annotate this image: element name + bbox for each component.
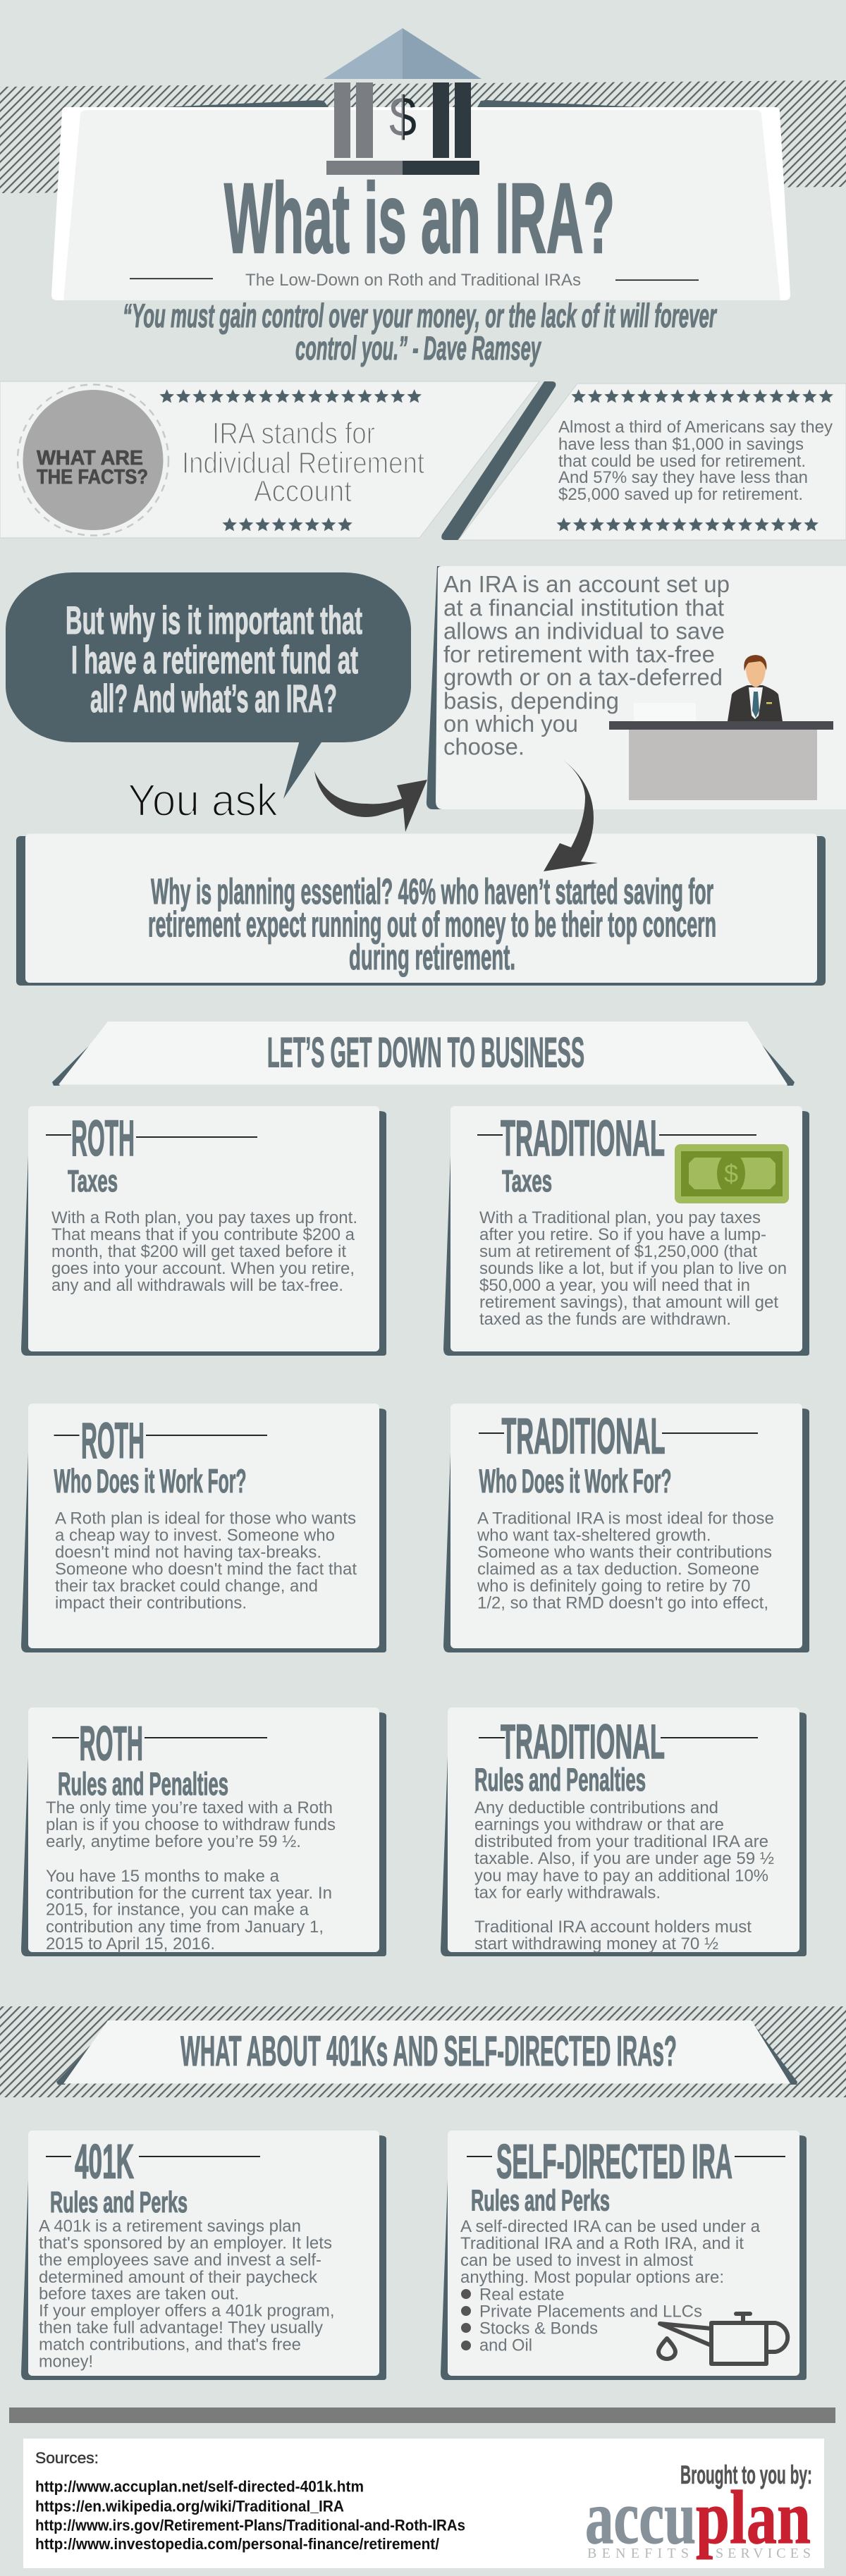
panel: facts right [458, 384, 846, 540]
body text [460, 2217, 760, 2287]
savings stats: And 57% say they have less than [558, 468, 808, 487]
savings stats: $25,000 saved up for retirement. [558, 485, 803, 504]
IRA definition [182, 417, 424, 508]
body text: contribution for the current tax year. In [46, 1884, 332, 1903]
panel: why planning [16, 833, 826, 986]
definition text: on which you [443, 711, 578, 737]
definition text: An IRA is an account set up [443, 571, 730, 597]
stars bottom [221, 517, 353, 532]
body text [46, 1798, 336, 1954]
body text: who want tax-sheltered growth. [477, 1526, 711, 1545]
stars top [159, 389, 422, 403]
body text [479, 1208, 787, 1329]
card: Self-directed IRA [441, 2130, 807, 2380]
definition text: allows an individual to save [443, 618, 725, 644]
IRA definition: Account [254, 474, 352, 508]
panel: hero title [51, 100, 790, 300]
definition text [443, 571, 730, 760]
body text: determined amount of their paycheck [39, 2268, 318, 2287]
body text: goes into your account. When you retire, [51, 1259, 355, 1278]
body text: taxable. Also, if you are under age 59 ½ [474, 1849, 774, 1868]
body text: 2015 to April 15, 2016. [46, 1934, 215, 1954]
speech bubble: I have a retirement fund at [71, 637, 358, 682]
panel: facts left [0, 381, 539, 538]
card: Traditional rules [441, 1707, 807, 1956]
icon: banker at desk [609, 655, 833, 800]
card: Roth who [21, 1404, 386, 1652]
speech bubble [6, 572, 411, 799]
divider bar [9, 2408, 835, 2423]
body text [55, 1509, 357, 1613]
bullet list [461, 2286, 702, 2355]
body text: A Traditional IRA is most ideal for those [477, 1509, 774, 1528]
arrow: definition to why panel [544, 759, 598, 871]
body text: sum at retirement of $1,250,000 (that [479, 1242, 757, 1261]
heading: ROTH [71, 1111, 135, 1167]
body text: Traditional IRA account holders must [474, 1918, 752, 1937]
body text: a cheap way to invest. Someone who [55, 1526, 335, 1545]
body text: The only time you’re taxed with a Roth [46, 1798, 333, 1817]
body text: can be used to invest in almost [460, 2251, 693, 2270]
heading: TRADITIONAL [502, 1409, 666, 1465]
subheading: Who Does it Work For? [54, 1462, 247, 1499]
speech bubble: But why is it important that [66, 598, 362, 642]
panel: footer [23, 2439, 824, 2568]
stars bottom [556, 517, 819, 532]
definition text: choose. [443, 733, 525, 760]
icon: oil can [658, 2314, 787, 2364]
speech bubble: all? And what’s an IRA? [90, 676, 337, 720]
subheading: Rules and Penalties [58, 1766, 228, 1802]
sources: http://www.accuplan.net/self-directed-401k.htm [35, 2477, 364, 2496]
savings stats: that could be used for retirement. [558, 452, 806, 471]
arrow: bubble to definition [314, 771, 427, 832]
hatched ribbon: header [0, 80, 846, 193]
icon: dashed circle badge: WHAT ARE [37, 447, 143, 470]
body text: 2015, for instance, you can make a [46, 1901, 309, 1919]
body text: That means that if you contribute $200 a [51, 1225, 355, 1244]
IRA definition: IRA stands for [212, 417, 375, 450]
sources: Sources: [35, 2449, 99, 2467]
body text [477, 1509, 774, 1613]
heading: TRADITIONAL [501, 1715, 665, 1769]
panel: 401k heading [56, 2020, 797, 2085]
body text: If your employer offers a 401k program, [39, 2301, 334, 2321]
body text: any and all withdrawals will be tax-free. [51, 1276, 343, 1295]
heading: ROTH [79, 1716, 143, 1771]
body text: contribution any time from January 1, [46, 1918, 324, 1937]
body text: doesn't mind not having tax-breaks. [55, 1542, 321, 1562]
panel: why planning: during retirement. [349, 937, 515, 977]
sources: http://www.irs.gov/Retirement-Plans/Traditional-and-Roth-IRAs [35, 2517, 465, 2534]
heading: 401K [75, 2135, 134, 2188]
body text: tax for early withdrawals. [474, 1884, 661, 1902]
body text: start withdrawing money at 70 ½ [474, 1934, 718, 1954]
body text [39, 2216, 334, 2372]
body text: A Roth plan is ideal for those who wants [55, 1509, 356, 1528]
bullet list: Stocks & Bonds [479, 2319, 598, 2338]
definition text: basis, depending [443, 688, 619, 713]
bullet list: Private Placements and LLCs [479, 2302, 702, 2321]
body text: their tax bracket could change, and [55, 1576, 318, 1596]
logo: accuplan [585, 2476, 811, 2561]
heading: ROTH [81, 1413, 145, 1469]
body text: Any deductible contributions and [474, 1798, 718, 1817]
panel: IRA definition [427, 566, 846, 809]
card: 401K [21, 2130, 386, 2380]
bullet list: and Oil [479, 2336, 532, 2355]
sources [35, 2449, 465, 2553]
definition text: growth or on a tax-deferred [443, 664, 723, 690]
card: Roth rules [21, 1707, 386, 1956]
subtitle with rules: The Low-Down on Roth and Traditional IRAs [245, 271, 581, 290]
body text: you may have to pay an additional 10% [474, 1867, 768, 1885]
body text: impact their contributions. [55, 1593, 247, 1613]
heading: TRADITIONAL [501, 1111, 665, 1167]
stars top [570, 389, 834, 403]
body text: that's sponsored by an employer. It lets [39, 2233, 332, 2253]
body text: retirement savings), that amount will get [479, 1293, 778, 1312]
body text: money! [39, 2352, 93, 2372]
icon: banknote [675, 1144, 789, 1203]
body text: match contributions, and that's free [39, 2335, 301, 2355]
divider slash [441, 381, 556, 540]
card: Traditional who [443, 1404, 809, 1652]
body text: Traditional IRA and a Roth IRA, and it [460, 2234, 744, 2253]
IRA definition: Individual Retirement [182, 446, 424, 480]
body text: claimed as a tax deduction. Someone [477, 1559, 759, 1579]
body text: $50,000 a year, you will need that in [479, 1276, 750, 1295]
body text: taxed as the funds are withdrawn. [479, 1310, 731, 1329]
savings stats [558, 417, 833, 504]
logo: accuplan: accu [585, 2476, 696, 2560]
body text: after you retire. So if you have a lump- [479, 1225, 766, 1244]
logo: accuplan: plan [696, 2476, 811, 2560]
body text: early, anytime before you’re 59 ½. [46, 1832, 301, 1851]
body text: With a Roth plan, you pay taxes up front. [51, 1208, 357, 1227]
icon: banknote: $ [724, 1159, 738, 1188]
body text: anything. Most popular options are: [460, 2268, 724, 2287]
body text: before taxes are taken out. [39, 2284, 239, 2304]
body text: 1/2, so that RMD doesn't go into effect, [477, 1593, 768, 1613]
savings stats: have less than $1,000 in savings [558, 435, 804, 454]
logo: accuplan: BENEFITS [587, 2546, 689, 2561]
body text: month, that $200 will get taxed before it [51, 1242, 346, 1261]
subheading: Taxes [502, 1164, 552, 1198]
body text: who is definitely going to retire by 70 [477, 1576, 750, 1596]
definition text: for retirement with tax-free [443, 642, 715, 667]
icon: bank building: $ [389, 85, 417, 148]
sources: https://en.wikipedia.org/wiki/Traditional_IRA [35, 2497, 344, 2515]
body text: earnings you withdraw or that are [474, 1815, 724, 1834]
body text: With a Traditional plan, you pay taxes [479, 1208, 761, 1227]
You ask label: You ask [128, 775, 278, 826]
bullet list: Real estate [479, 2286, 564, 2304]
body text: distributed from your traditional IRA are [474, 1832, 768, 1851]
icon: bank building [324, 28, 482, 175]
subheading: Rules and Perks [50, 2185, 188, 2219]
subheading: Rules and Perks [471, 2184, 610, 2216]
body text: the employees save and invest a self- [39, 2250, 321, 2270]
card: Traditional taxes [443, 1106, 809, 1356]
body text: then take full advantage! They usually [39, 2318, 324, 2338]
icon: dashed circle badge [18, 385, 168, 536]
hatched ribbon: second section [0, 2006, 846, 2097]
icon: dashed circle badge: THE FACTS? [37, 466, 148, 489]
body text: A self-directed IRA can be used under a [460, 2217, 760, 2236]
quote [123, 297, 717, 367]
definition text: at a financial institution that [443, 595, 724, 620]
savings stats: Almost a third of Americans say they [558, 417, 833, 437]
subheading: Taxes [68, 1164, 118, 1198]
quote: control you.” - Dave Ramsey [295, 329, 542, 367]
body text [474, 1798, 774, 1954]
body text: A 401k is a retirement savings plan [39, 2216, 301, 2236]
subheading: Rules and Penalties [474, 1762, 646, 1798]
panel: business heading [52, 1022, 795, 1086]
body text: sounds like a lot, but if you plan to live on [479, 1259, 787, 1278]
body text: Someone who wants their contributions [477, 1542, 772, 1562]
logo: accuplan: SERVICES [716, 2546, 811, 2561]
body text [51, 1208, 357, 1295]
body text: Someone who doesn't mind the fact that [55, 1559, 357, 1579]
card: Roth taxes [21, 1106, 386, 1356]
body text: You have 15 months to make a [46, 1867, 279, 1886]
body text: plan is if you choose to withdraw funds [46, 1815, 336, 1834]
sources: http://www.investopedia.com/personal-finance/retirement/ [35, 2535, 439, 2553]
subheading: Who Does it Work For? [479, 1462, 671, 1499]
